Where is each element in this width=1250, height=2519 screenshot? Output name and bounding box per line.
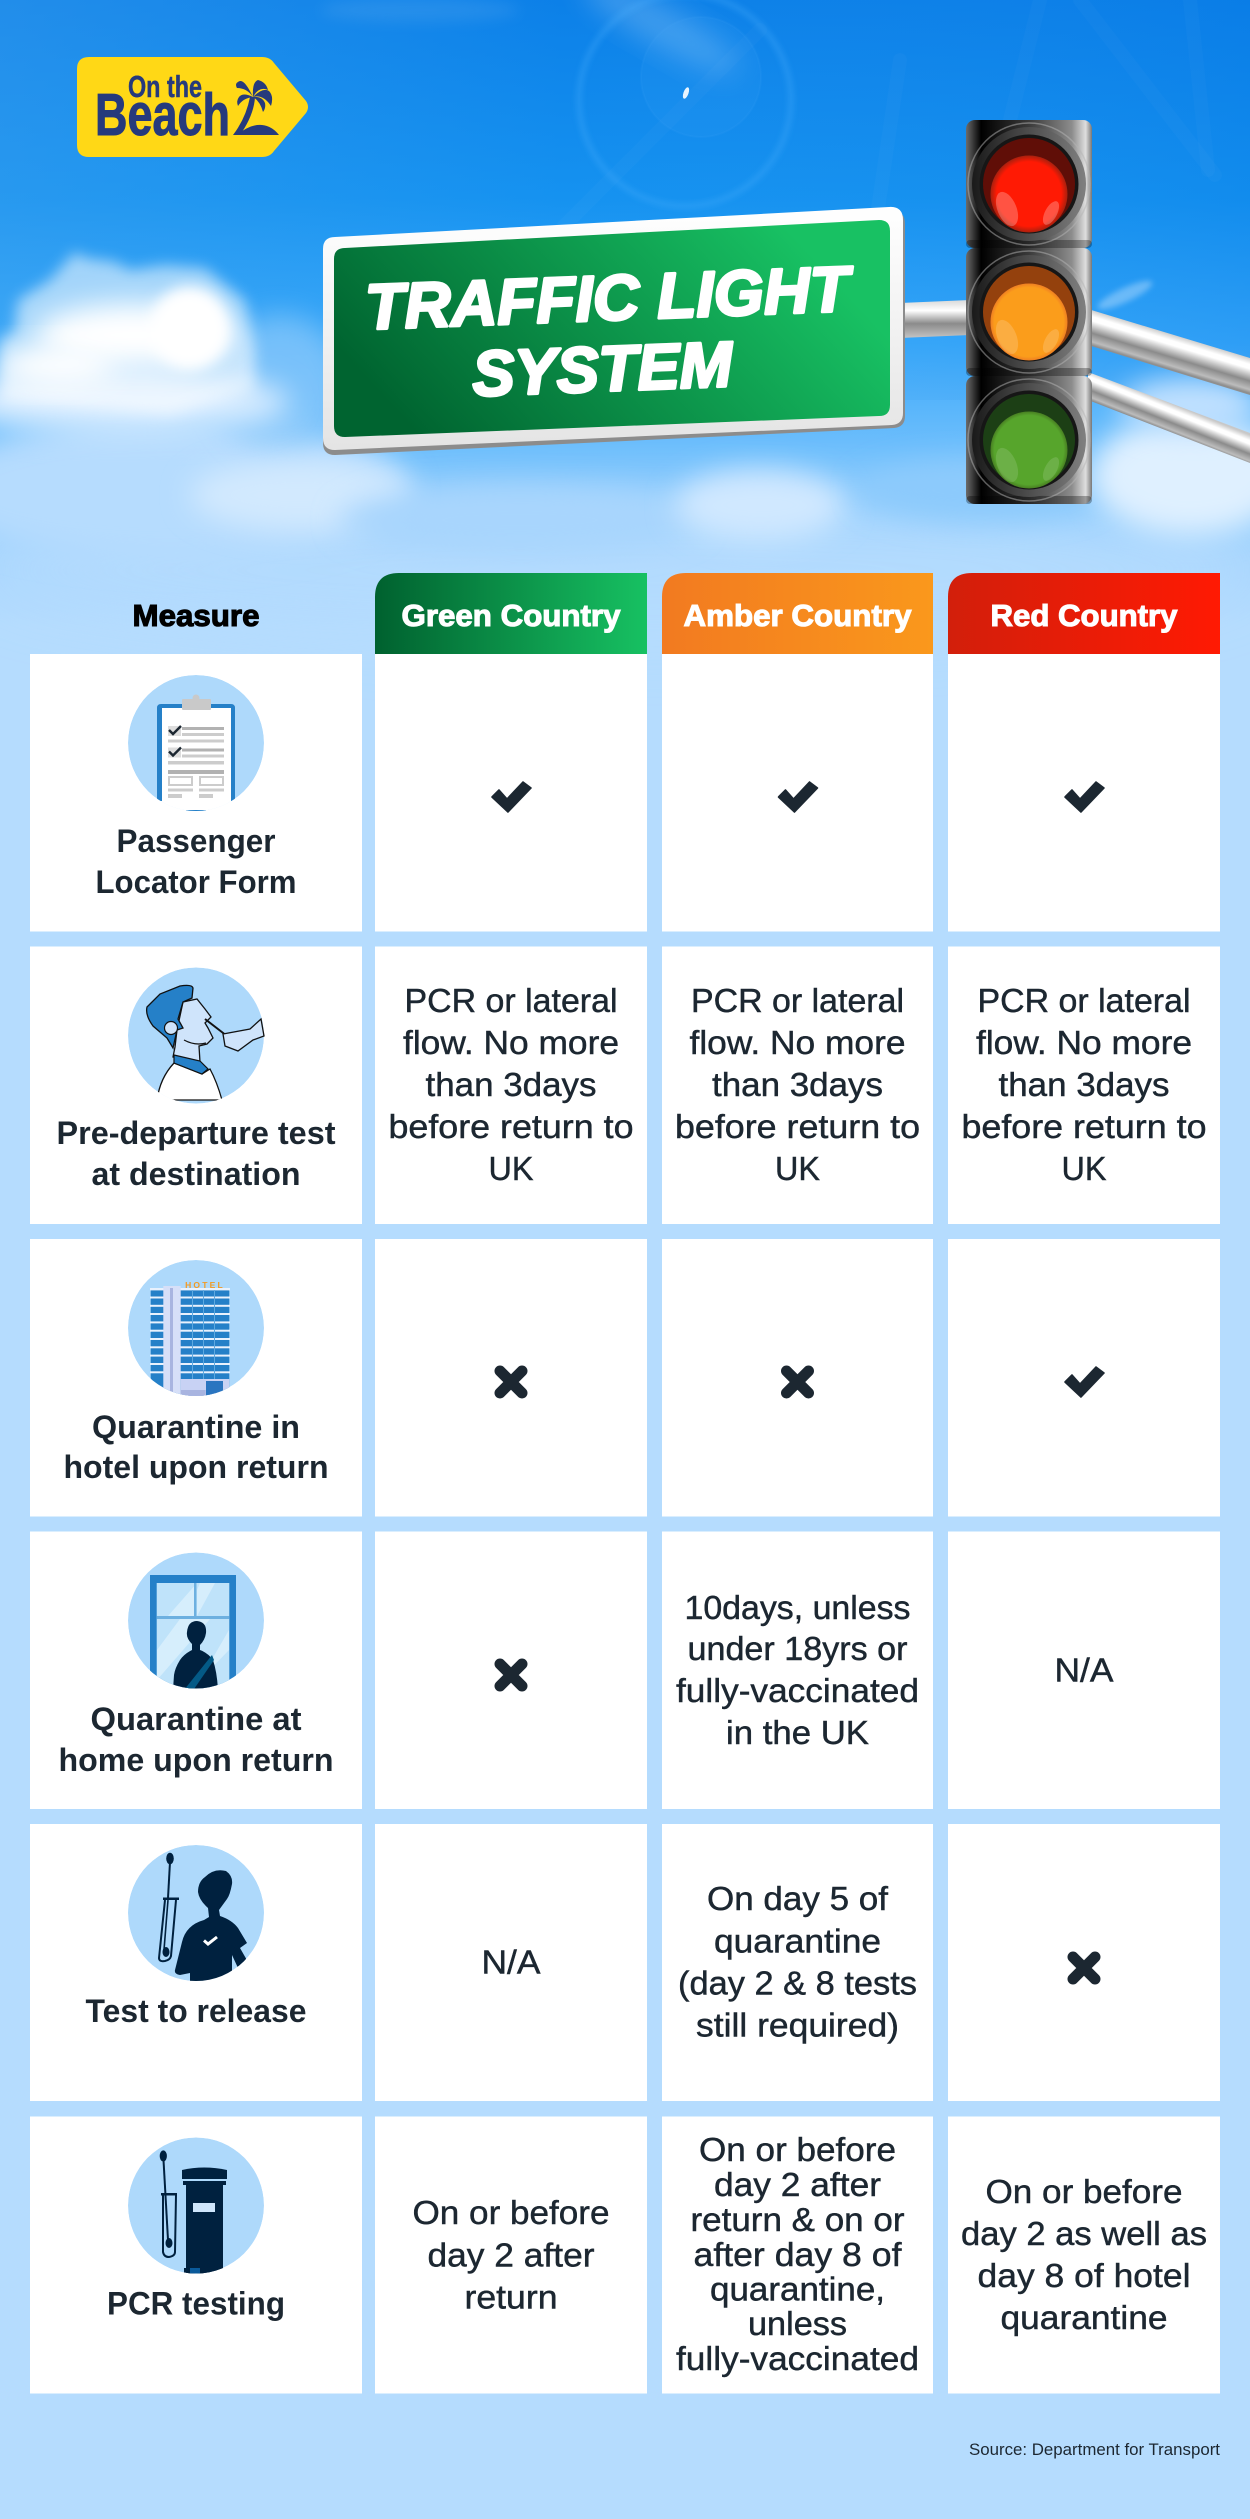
row: Pre-departure test at destination: [30, 946, 1220, 1224]
logo: On the Beach: On the: [128, 69, 202, 104]
label: Locator Form: [96, 864, 296, 900]
column heading: Amber Country: Amber Country: [684, 598, 912, 633]
tick: amber: [778, 782, 818, 812]
text: amber: UK: [775, 1150, 820, 1187]
text: amber: quarantine: [714, 1922, 881, 1960]
text: red: PCR or lateral: [978, 982, 1190, 1019]
tick: red: [1065, 782, 1104, 812]
text: red: UK: [1062, 1150, 1106, 1187]
icon: clipboard form: [120, 675, 270, 812]
label: [58, 1701, 334, 1778]
label: [96, 823, 296, 900]
text: green: On or before: [412, 2194, 610, 2231]
text: amber: 10days, unless: [684, 1589, 910, 1626]
text: green: N/A: [482, 1944, 540, 1980]
text: red: flow. No more: [976, 1024, 1192, 1061]
cross: green: [500, 1664, 522, 1686]
text: green: UK: [488, 1150, 534, 1187]
text: red: before return to: [962, 1108, 1206, 1145]
text: red: [961, 2173, 1207, 2336]
label: Quarantine in: [92, 1409, 300, 1445]
text: green: PCR or lateral: [404, 982, 618, 1019]
text: amber: quarantine,: [710, 2270, 885, 2308]
text: green: [388, 982, 634, 1187]
text: amber: before return to: [675, 1108, 920, 1145]
text: amber: (day 2 & 8 tests: [678, 1964, 917, 2002]
icon: hotel: [128, 1260, 264, 1398]
text: amber: after day 8 of: [694, 2236, 902, 2273]
text: green: return: [464, 2278, 558, 2316]
cross: amber: [786, 1371, 808, 1393]
label: Test to release: [86, 1993, 306, 2029]
icon: hotel: HOTEL: [185, 1280, 225, 1290]
sign title: SYSTEM: [471, 328, 735, 410]
support pole: lower right: [1088, 372, 1250, 463]
text: green: [412, 2194, 610, 2316]
text: amber: fully-vaccinated: [676, 1672, 919, 1709]
text: amber: [678, 1880, 917, 2044]
text: green: than 3days: [426, 1066, 596, 1103]
text: green: flow. No more: [403, 1024, 619, 1061]
row: Test to release: [30, 1824, 1220, 2101]
text: green: before return to: [388, 1108, 634, 1145]
cross: green: [500, 1371, 522, 1393]
row: Quarantine in hotel upon return: [30, 1239, 1220, 1516]
text: amber: than 3days: [712, 1066, 883, 1103]
column heading: Measure: Measure: [132, 598, 260, 633]
text: amber: still required): [696, 2006, 899, 2044]
icon: nasal swab test: [128, 968, 264, 1104]
red light: [968, 123, 1090, 245]
text: amber: return & on or: [690, 2201, 904, 2238]
text: amber: fully-vaccinated: [676, 2340, 919, 2377]
column heading: Green Country: Green Country: [402, 598, 621, 633]
label: [56, 1115, 336, 1192]
text: red: than 3days: [998, 1066, 1170, 1103]
label: at destination: [92, 1156, 300, 1192]
logo: On the Beach: [77, 57, 308, 157]
amber light: [968, 251, 1090, 373]
icon: palm tree: [233, 80, 279, 135]
label: [64, 1409, 328, 1485]
text: amber: PCR or lateral: [691, 982, 904, 1019]
label: home upon return: [58, 1742, 334, 1778]
source note: Source: Department for Transport: [969, 2440, 1220, 2459]
traffic light: [966, 120, 1092, 504]
text: red: N/A: [1054, 1652, 1114, 1688]
text: amber: in the UK: [726, 1714, 869, 1751]
support pole: upper right: [1088, 309, 1250, 395]
sign title: [364, 253, 855, 410]
text: red: day 2 as well as: [961, 2215, 1207, 2252]
icon: test tube and person: [128, 1845, 264, 1990]
text: amber: On day 5 of: [707, 1880, 889, 1917]
text: red: day 8 of hotel: [978, 2257, 1190, 2294]
row: PCR testing: [30, 2116, 1220, 2394]
support pole: sign to light: [900, 300, 970, 338]
label: PCR testing: [107, 2286, 285, 2322]
column heading: Green Country: [375, 573, 647, 654]
text: amber: flow. No more: [690, 1024, 906, 1061]
label: Passenger: [116, 823, 276, 859]
clouds: [0, 252, 1250, 640]
text: green: day 2 after: [428, 2236, 595, 2274]
label: Pre-departure test: [56, 1115, 336, 1151]
row: Passenger Locator Form: [30, 654, 1220, 932]
tick: red: [1065, 1367, 1104, 1397]
text: amber: [675, 982, 920, 1187]
logo: On the Beach: Beach: [95, 82, 230, 148]
text: amber: unless: [748, 2305, 847, 2342]
text: red: On or before: [986, 2173, 1182, 2210]
text: red: quarantine: [1000, 2299, 1168, 2336]
text: amber: day 2 after: [714, 2166, 881, 2203]
text: amber: On or before: [699, 2131, 896, 2168]
lens flare: [579, 0, 791, 206]
column heading: Red Country: Red Country: [990, 598, 1178, 633]
icon: test tube and post box: [128, 2138, 264, 2276]
label: Quarantine at: [90, 1701, 302, 1737]
label: hotel upon return: [64, 1449, 328, 1485]
tick: green: [492, 782, 531, 812]
text: amber: [676, 1589, 919, 1751]
cross: red: [1073, 1957, 1095, 1979]
road sign: [323, 207, 905, 455]
text: amber: [676, 2131, 919, 2377]
row: Quarantine at home upon return: [30, 1532, 1220, 1809]
column heading: Amber Country: [662, 573, 933, 654]
sign title: TRAFFIC LIGHT: [364, 253, 855, 343]
sky background: [0, 0, 1250, 660]
text: amber: under 18yrs or: [688, 1630, 908, 1667]
icon: person at window: [128, 1552, 264, 1695]
text: red: [962, 982, 1206, 1187]
column heading: Red Country: [948, 573, 1220, 654]
green light: [968, 379, 1090, 501]
